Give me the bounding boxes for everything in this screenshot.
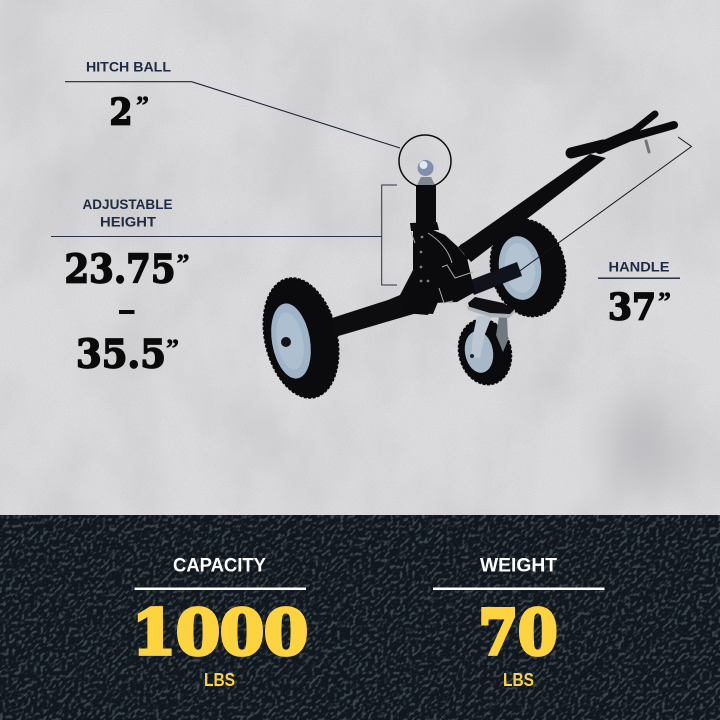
hitch ball value: ” [136, 91, 149, 120]
adjustable height label second line: HEIGHT [100, 214, 156, 230]
height range value: ” [166, 334, 179, 363]
adjustable height label: ADJUSTABLE [82, 196, 172, 212]
hitch ball leader line [65, 82, 400, 148]
pivot plate [400, 228, 475, 315]
beam to rear wheel hub [468, 262, 522, 295]
concrete background [0, 0, 720, 515]
weight value: 70 [478, 596, 558, 669]
callout: adjustable height [51, 185, 397, 378]
hitch ball value: 2 [110, 92, 132, 134]
capacity rule [134, 588, 306, 590]
callout: hitch ball [65, 59, 451, 187]
height range value: 23.75 [64, 246, 176, 292]
callout: handle [598, 259, 680, 328]
height range value: ” [176, 249, 190, 278]
handle rule [598, 278, 680, 279]
hitch ball label: HITCH BALL [86, 59, 171, 75]
plate holes [420, 236, 429, 282]
left wheel [252, 270, 350, 406]
dark leather band [0, 515, 720, 720]
handle value: ” [658, 287, 671, 316]
lock pin and arc slot [411, 232, 473, 303]
handle label: HANDLE [608, 259, 670, 275]
handle grip [571, 114, 674, 153]
handle callout line [510, 137, 692, 278]
axle and frame [332, 270, 440, 337]
right rear wheel [482, 212, 574, 324]
hitch ball [417, 160, 435, 185]
stat: capacity [132, 556, 308, 690]
weight heading: WEIGHT [480, 556, 557, 577]
capacity heading: CAPACITY [173, 556, 266, 577]
vertical post [416, 185, 436, 225]
capacity unit: LBS [204, 670, 235, 690]
handle bar [458, 154, 606, 262]
height range value [64, 246, 190, 378]
handle value: 37 [608, 286, 656, 328]
height range value: 35.5 [76, 332, 166, 378]
hitch ball ring [399, 135, 451, 187]
capacity value: 1000 [132, 596, 308, 669]
caster wheel [452, 297, 518, 390]
weight unit: LBS [503, 670, 534, 690]
trailer dolly product illustration [252, 114, 691, 406]
hitch ball value [110, 91, 149, 134]
weight rule [433, 588, 604, 590]
adjustable height leader and bracket [51, 185, 397, 285]
stat: weight [433, 556, 604, 690]
